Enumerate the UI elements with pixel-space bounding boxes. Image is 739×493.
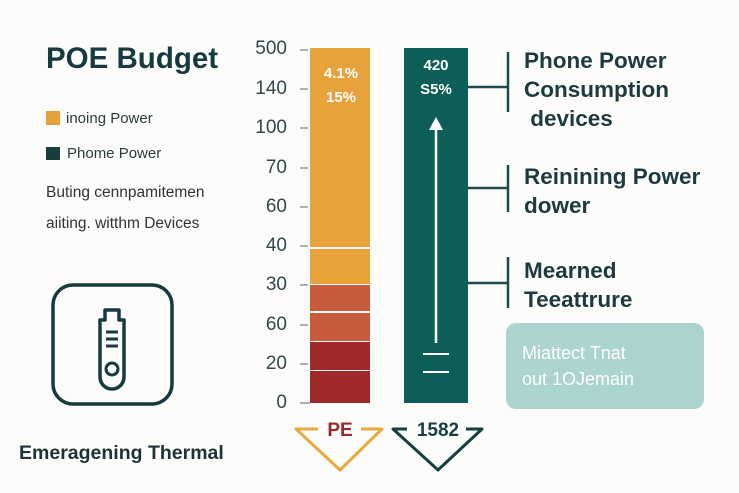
callout box: out 1OJemain [522,369,634,389]
axis labels: 40 [266,235,287,256]
title: POE Budget [46,42,218,75]
axis labels: 30 [266,274,287,295]
label: phone power: Consumption [524,77,669,102]
axis labels: 100 [255,117,287,138]
label: measured temperature: Mearned [524,258,617,283]
axis labels: 70 [266,157,287,178]
bar: teal: S5% [420,81,452,98]
description text: aiiting. witthm Devices [46,215,199,232]
chevron: PE [294,420,384,472]
bar: teal [404,48,468,403]
bar: orange stacked [310,48,370,403]
description text: Buting cennpamitemen [46,184,205,201]
label: remaining power: dower [524,193,590,218]
bar: teal: 420 [423,57,449,74]
axis labels: 0 [276,392,287,413]
label: remaining power: Reinining Power [524,164,700,189]
axis labels: 60 [266,314,287,335]
connectors [468,52,510,308]
chevron: 1582 [392,420,484,472]
callout box [506,323,704,409]
label: phone power: devices [530,106,613,131]
legend item: orange: inoing Power [66,110,153,127]
bar value text [324,65,358,106]
bar value text: 4.1% [324,65,358,82]
axis labels: 140 [255,78,287,99]
axis labels: 60 [266,196,287,217]
description text [46,184,205,232]
bar value text: 15% [326,89,356,106]
legend item: teal: Phome Power [67,145,161,162]
chevron: 1582: 1582 [417,420,459,441]
label: measured temperature [524,258,632,312]
callout box: Miattect Tnat [522,343,626,363]
label: phone power: Phone Power [524,48,667,73]
label: phone power [524,48,669,131]
axis labels: 500 [255,38,287,59]
caption: thermal: Emeragening Thermal [19,442,224,464]
arrow up [423,117,449,373]
chevron: PE: PE [327,420,353,441]
axis labels: 20 [266,353,287,374]
label: remaining power [524,164,700,218]
icon: thermal device [51,283,174,406]
label: measured temperature: Teeattrure [524,287,632,312]
axis labels [255,38,310,413]
legend [46,110,161,162]
